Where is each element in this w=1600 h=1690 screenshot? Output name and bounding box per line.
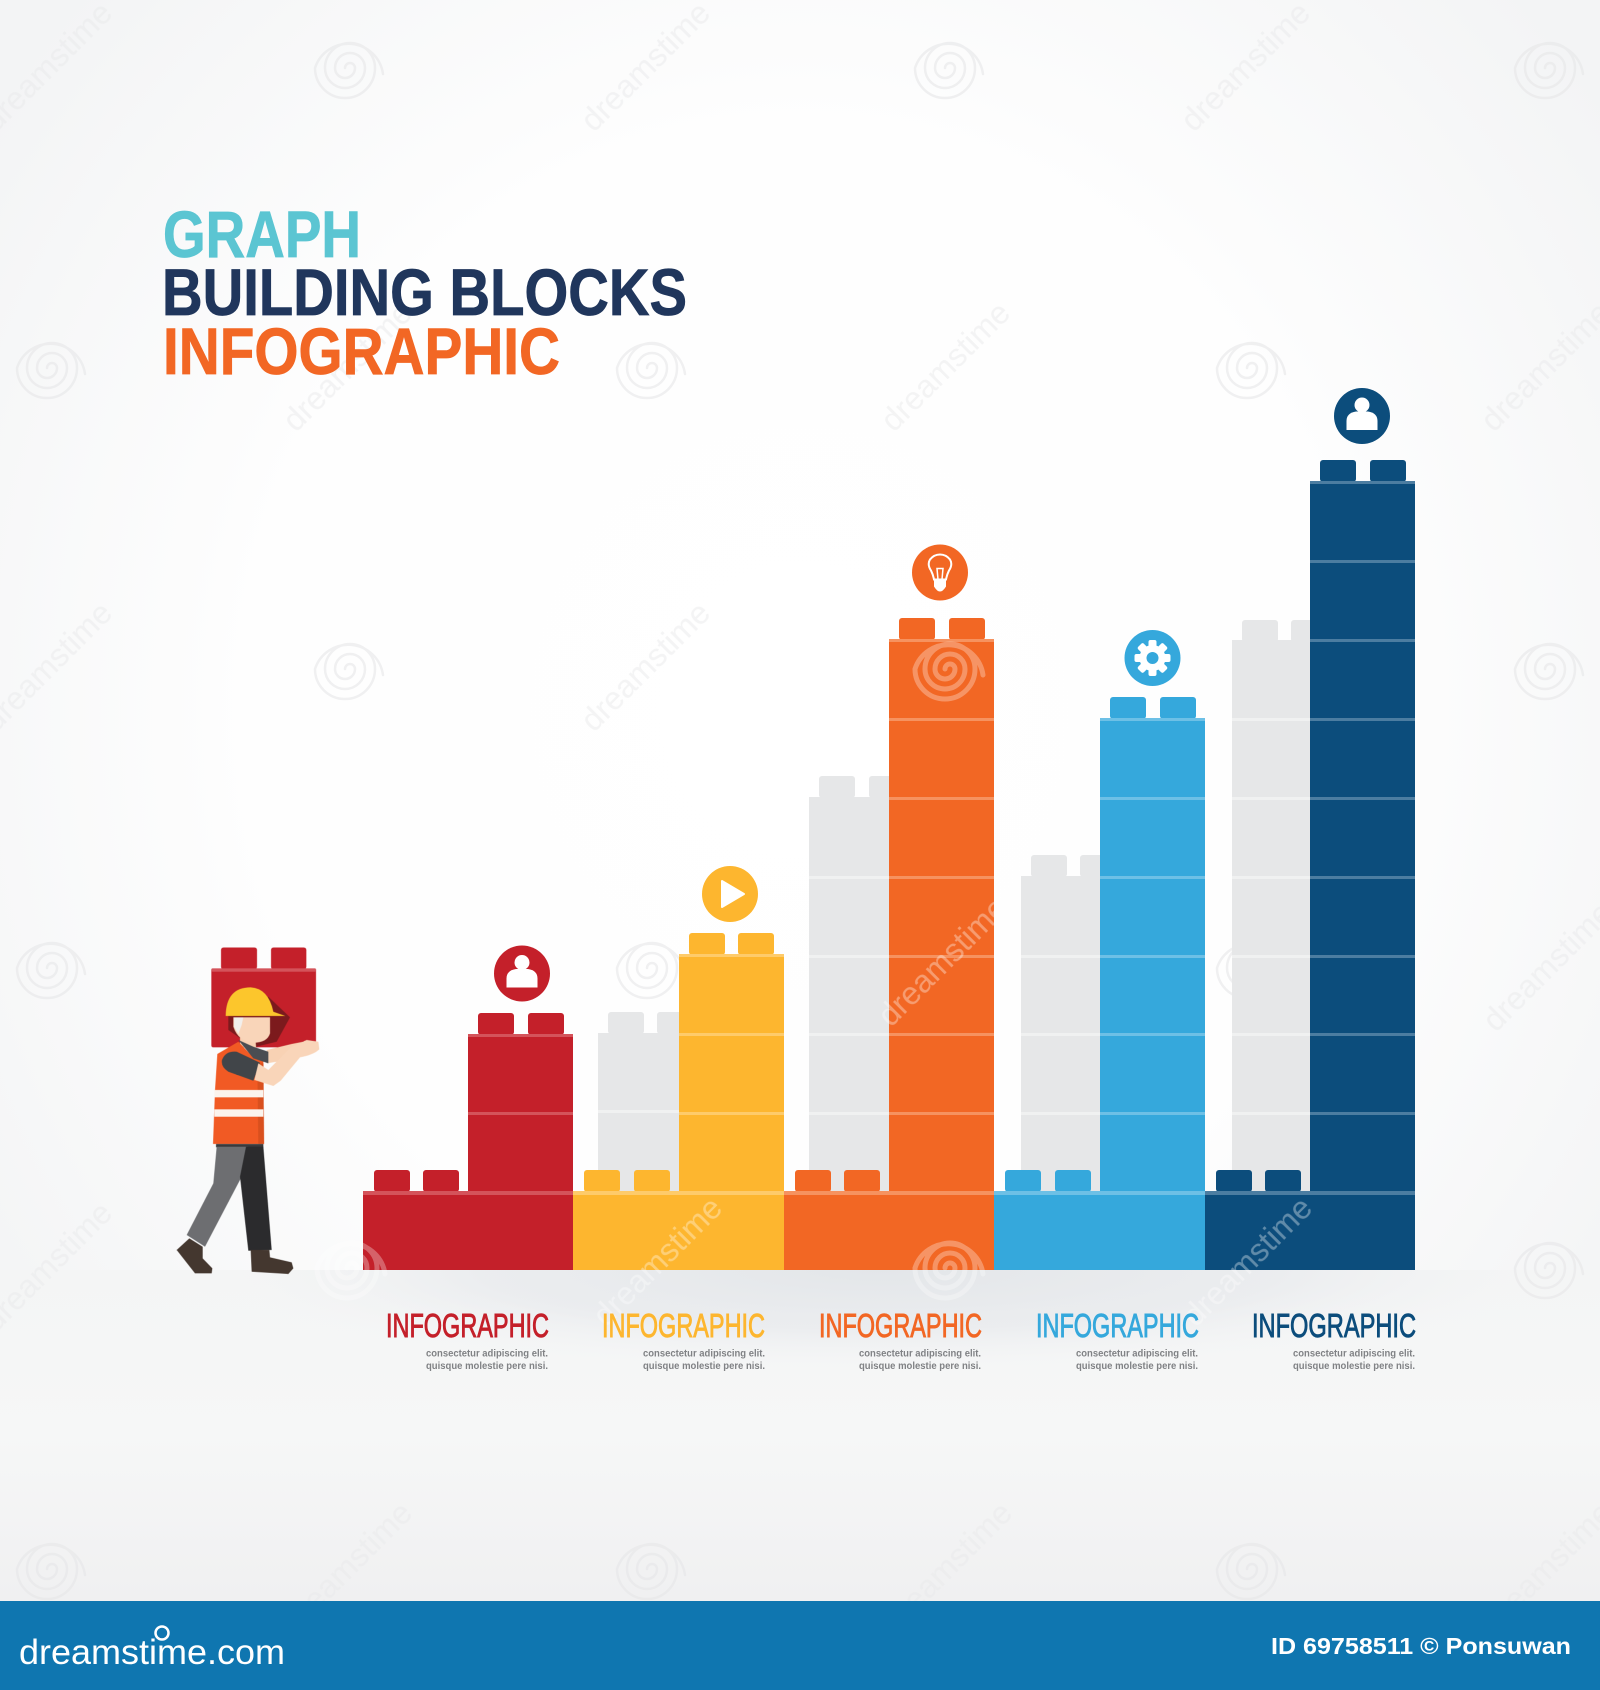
watermark: wordmarks over bars xyxy=(275,889,1319,1333)
icon: yellow play xyxy=(702,866,758,922)
helmet xyxy=(226,987,285,1016)
face xyxy=(233,1017,270,1043)
back boot xyxy=(177,1238,212,1273)
watermark: wordmarks over bars: dreamstime xyxy=(275,894,419,1038)
ear strap xyxy=(234,1017,243,1034)
label heading: INFOGRAPHIC xyxy=(602,1307,765,1344)
label description: consectetur adipiscing elit. xyxy=(1076,1348,1198,1360)
vest xyxy=(213,1042,264,1144)
label description: quisque molestie pere nisi. xyxy=(643,1361,765,1372)
grey column behind blue xyxy=(1021,855,1116,1191)
label column: red xyxy=(386,1307,549,1372)
label heading: INFOGRAPHIC xyxy=(1252,1307,1416,1344)
front boot xyxy=(251,1250,293,1274)
watermark: wordmarks over bars: dreamstime xyxy=(1175,1189,1319,1333)
grey column behind navy xyxy=(1232,620,1327,1191)
near arm xyxy=(254,1040,319,1086)
label description xyxy=(643,1348,765,1372)
watermark: spirals over bars xyxy=(317,644,983,1298)
worker carrying a block xyxy=(177,947,319,1274)
waistband xyxy=(216,1144,263,1147)
watermark: diagonal wordmarks on background: dreamstime xyxy=(875,1494,1019,1638)
label description: consectetur adipiscing elit. xyxy=(859,1348,981,1360)
title line: INFOGRAPHIC: INFOGRAPHIC xyxy=(163,314,560,388)
icon: red person xyxy=(494,946,550,1002)
label column: yellow xyxy=(602,1307,765,1372)
label heading: INFOGRAPHIC xyxy=(1036,1307,1199,1344)
label column: orange xyxy=(819,1307,982,1372)
icon: navy person xyxy=(1334,388,1390,444)
label description: consectetur adipiscing elit. xyxy=(426,1348,548,1360)
back leg xyxy=(187,1147,248,1247)
watermark: diagonal wordmarks on background: dreamstime xyxy=(275,1494,419,1638)
vest stripes xyxy=(214,1090,263,1117)
footer logo spiral xyxy=(156,1626,168,1640)
label heading: INFOGRAPHIC xyxy=(386,1307,549,1344)
icon: orange light bulb xyxy=(912,544,968,600)
grey column behind orange xyxy=(809,776,905,1191)
label column: navy xyxy=(1252,1307,1416,1372)
vest side shade xyxy=(257,1063,264,1144)
yellow bar: column and base xyxy=(573,933,784,1270)
watermark: diagonal wordmarks on background: dreamstime xyxy=(275,294,419,438)
carried red block xyxy=(211,947,316,1047)
label heading: INFOGRAPHIC xyxy=(819,1307,982,1344)
front leg xyxy=(240,1147,272,1251)
footer logo wordmark: dreamstime.com xyxy=(19,1633,285,1672)
grey column behind yellow xyxy=(598,1012,693,1191)
label description xyxy=(426,1348,548,1372)
watermark: diagonal wordmarks on background: dreamstime xyxy=(573,594,717,738)
label description: quisque molestie pere nisi. xyxy=(1076,1361,1198,1372)
label description: quisque molestie pere nisi. xyxy=(1293,1361,1415,1372)
label description xyxy=(1293,1348,1415,1372)
label description xyxy=(859,1348,981,1372)
title xyxy=(162,197,687,388)
watermark: diagonal wordmarks on background: dreamstime xyxy=(873,294,1017,438)
footer bar xyxy=(0,1601,1600,1690)
red bar: column and base xyxy=(363,1013,573,1270)
title line: GRAPH: GRAPH xyxy=(163,197,361,271)
watermark: wordmarks over bars: dreamstime xyxy=(870,889,1014,1033)
navy bar: column and base xyxy=(1205,460,1415,1270)
sleeve xyxy=(222,1052,260,1081)
title line: BUILDING BLOCKS: BUILDING BLOCKS xyxy=(162,255,687,329)
label description: quisque molestie pere nisi. xyxy=(859,1361,981,1372)
label description: quisque molestie pere nisi. xyxy=(426,1361,548,1372)
footer credit: ID 69758511 © Ponsuwan xyxy=(1271,1633,1571,1659)
neck and far arm xyxy=(240,1033,307,1063)
label description: consectetur adipiscing elit. xyxy=(643,1348,765,1360)
collar xyxy=(238,1040,268,1063)
orange bar: column and base xyxy=(784,618,994,1270)
label description: consectetur adipiscing elit. xyxy=(1293,1348,1415,1360)
blue bar: column and base xyxy=(994,697,1205,1270)
watermark: wordmarks over bars: dreamstime xyxy=(585,1189,729,1333)
label column: blue xyxy=(1036,1307,1199,1372)
icon: blue gear xyxy=(1124,630,1180,686)
label description xyxy=(1076,1348,1198,1372)
head shadow xyxy=(228,997,290,1047)
